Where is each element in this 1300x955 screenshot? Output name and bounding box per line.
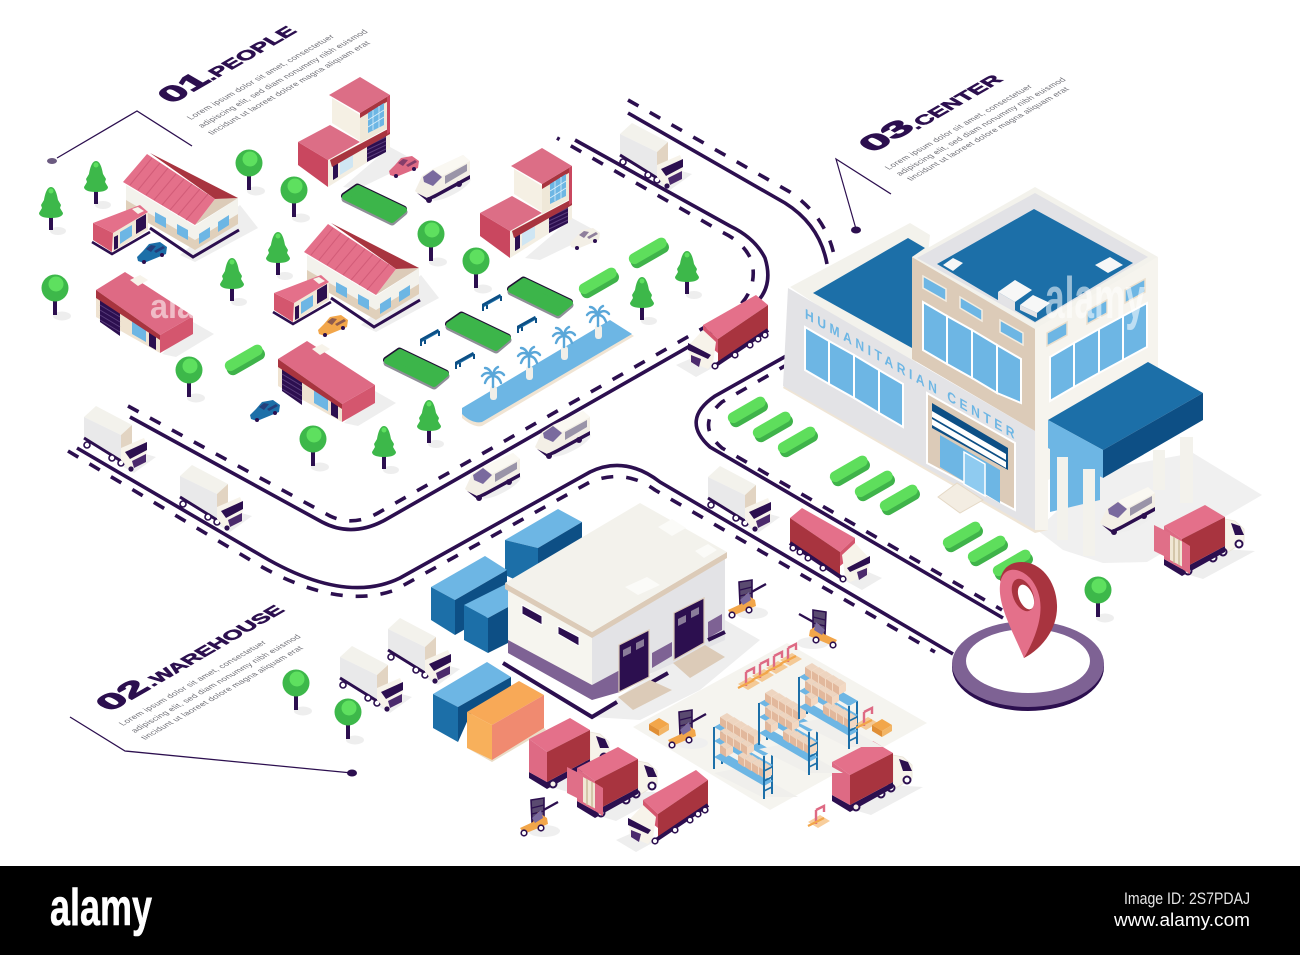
callout line: people — [47, 111, 192, 164]
icon: truck with open doors — [1154, 505, 1255, 579]
footer image id: Image ID: 2S7PDAJ — [1124, 889, 1250, 908]
icon: modern house 2 — [480, 148, 598, 260]
icon: van — [535, 411, 593, 461]
container middle — [431, 556, 507, 635]
warehouse base line — [503, 632, 725, 717]
icon: location pin — [952, 562, 1104, 711]
canopy roof — [1048, 362, 1203, 450]
warehouse left wall — [508, 587, 592, 700]
upper right windows — [1047, 279, 1145, 346]
panel: 02 warehouse heading — [88, 602, 306, 741]
hedges — [223, 236, 671, 377]
text block: warehouse description: Lorem ipsum dolor sit amet, consectetuer — [116, 639, 269, 727]
icon: white truck — [388, 618, 460, 685]
panel: people district — [39, 77, 702, 474]
warehouse roof — [505, 503, 727, 632]
icon: tree — [334, 698, 364, 744]
roof equipment — [943, 257, 1123, 318]
icon: van at canopy — [1100, 487, 1158, 537]
back columns — [1153, 437, 1193, 503]
yard floor — [633, 643, 927, 810]
icon: red truck facing left — [616, 770, 708, 852]
upper left windows — [923, 276, 1023, 345]
ground shadow — [1037, 453, 1262, 563]
crate — [872, 719, 892, 737]
tall block roof rim — [912, 187, 1158, 329]
icon: house 1 — [92, 153, 258, 262]
lawns — [344, 187, 570, 386]
panel: 01 people heading — [150, 23, 373, 136]
text block: center description: adipiscing elit, sed diam nonummy nibh euismod — [893, 76, 1068, 177]
text block: center description: tincidunt ut laoreet dolore magna aliquam erat — [904, 85, 1072, 182]
entrance steps — [938, 483, 983, 513]
icon: forklift — [520, 798, 560, 837]
building sign: HUMANITARIAN CENTER — [805, 305, 1015, 442]
entrance frame — [927, 393, 1015, 510]
container back — [505, 509, 582, 590]
heading: 03 center: .CENTER — [903, 72, 1007, 132]
glass under canopy — [1050, 448, 1100, 512]
callout line: center — [836, 159, 891, 234]
roof details — [625, 519, 717, 595]
icon: forklift — [797, 610, 837, 649]
pallet jacks row — [738, 644, 802, 690]
heading: 01 people: .PEOPLE — [198, 23, 301, 83]
warehouse windows — [522, 605, 579, 646]
footer bar — [0, 866, 1300, 955]
text block: center description: Lorem ipsum dolor sit amet, consectetuer — [882, 83, 1035, 171]
footer url: www.alamy.com — [1113, 910, 1250, 930]
icon: forklift — [728, 580, 768, 619]
container near warehouse — [464, 583, 510, 653]
watermark text: ala — [150, 288, 196, 326]
road: center approach — [696, 355, 1003, 618]
hedges in front of the center — [726, 395, 1035, 582]
panel: warehouse yard — [282, 503, 927, 852]
tall block inner roof — [917, 193, 1148, 323]
road: people district loop — [128, 138, 768, 530]
warehouse roof edge — [505, 552, 727, 638]
icon: shelf — [799, 663, 883, 749]
text block: people description: adipiscing elit, sed diam nonummy nibh euismod — [195, 28, 370, 129]
canopy front — [1103, 393, 1203, 478]
icon: white truck — [180, 465, 252, 532]
icon: red truck — [529, 718, 620, 792]
panel: vans and trucks on roads — [84, 123, 882, 590]
icon: modern house 1 — [298, 77, 416, 189]
watermark text: alamy — [1045, 266, 1145, 331]
pallet jack single — [808, 806, 830, 828]
icon: shelf — [714, 713, 798, 799]
icon: forklift — [668, 710, 708, 749]
heading: 01 people: 01 — [150, 68, 218, 108]
left wing roof — [790, 223, 930, 370]
ramp 2 — [673, 645, 725, 678]
canopy side — [1048, 420, 1103, 478]
big windows on tall block right face — [1050, 303, 1147, 401]
ramp 1 — [618, 680, 672, 710]
heading: 02 warehouse: 02 — [88, 675, 158, 716]
benches — [420, 294, 537, 369]
text block: people description: Lorem ipsum dolor sit amet, consectetuer — [184, 33, 337, 121]
warehouse purple band — [508, 640, 592, 700]
road: warehouse route — [68, 448, 953, 654]
icon: truck with open doors — [567, 747, 668, 821]
watermark text — [150, 266, 1145, 331]
heading: 02 warehouse — [88, 602, 289, 716]
icon: white truck — [340, 646, 412, 713]
text block: people description: tincidunt ut laoreet dolore magna aliquam erat — [205, 39, 373, 136]
left wing front wall — [783, 288, 1035, 530]
heading: 03 center — [851, 72, 1007, 157]
tall block left face — [912, 257, 1035, 431]
icon: van — [415, 155, 473, 205]
icon: tree — [282, 670, 312, 716]
heading: 03 center: 03 — [851, 115, 922, 157]
warehouse right purple band — [592, 614, 722, 700]
fountain pool with palms — [462, 306, 634, 426]
icon: red truck facing left — [676, 295, 768, 377]
crate — [649, 718, 669, 736]
footer logo: alamy — [50, 879, 152, 937]
entrance glass — [940, 435, 1000, 503]
left wing blue roof — [813, 238, 925, 348]
orange container — [467, 681, 546, 762]
callout line: warehouse — [70, 717, 357, 776]
base plate — [783, 382, 1048, 533]
pin head — [1000, 562, 1057, 658]
big windows on tall block left face — [923, 302, 1021, 403]
text block: warehouse description: adipiscing elit, sed diam nonummy nibh euismod — [128, 633, 303, 734]
lower windows on left wing — [805, 327, 903, 427]
warehouse door 2 — [674, 598, 704, 660]
icon: shelf — [759, 689, 843, 775]
icon: garage 2 — [278, 341, 396, 426]
warehouse door 1 — [619, 630, 649, 692]
icon: red truck — [790, 508, 882, 590]
icon: garage 1 — [96, 272, 214, 357]
pin base — [952, 623, 1104, 711]
road: top right segment — [628, 100, 835, 264]
warehouse right wall — [592, 557, 725, 700]
tall block right face — [1035, 257, 1158, 530]
entrance awning — [932, 403, 1008, 470]
trees — [39, 150, 702, 474]
icon: house 2 — [273, 223, 439, 332]
panel: humanitarian center building — [726, 187, 1262, 622]
entrance door — [964, 452, 985, 496]
icon: tree — [1084, 576, 1114, 622]
cars — [137, 156, 600, 422]
heading: 01 people — [150, 23, 301, 108]
text block: warehouse description: tincidunt ut laoreet dolore magna aliquam erat — [138, 644, 306, 741]
blue container front — [433, 662, 511, 742]
icon: white truck — [620, 123, 692, 190]
tall block blue roof — [937, 209, 1133, 322]
warehouse shadow — [592, 620, 760, 720]
heading: 02 warehouse: .WAREHOUSE — [139, 602, 289, 689]
icon: van — [465, 453, 523, 503]
pallet jack by crate — [856, 708, 878, 730]
icon: red truck — [832, 741, 923, 815]
icon: white truck — [708, 466, 780, 533]
panel: 03 center heading — [851, 72, 1072, 182]
icon: white truck — [84, 406, 156, 473]
front columns — [1057, 457, 1095, 556]
